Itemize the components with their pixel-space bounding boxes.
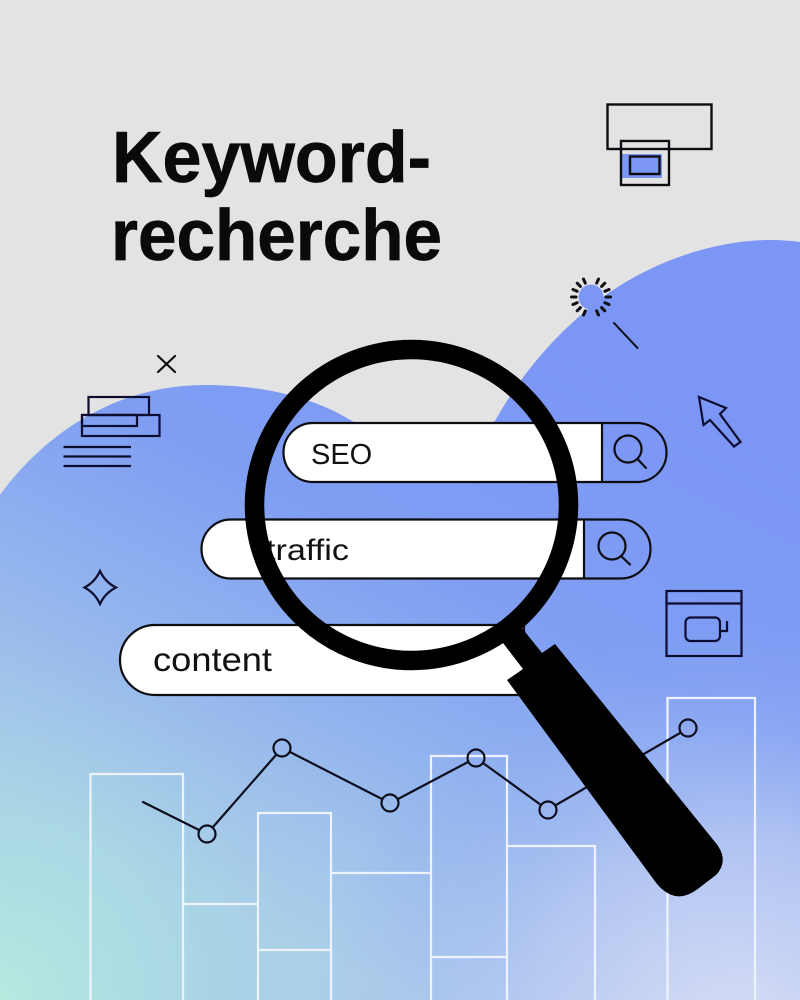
search bar: traffic: traffic [266,534,349,567]
magnifying glass [254,350,723,896]
search bar: SEO [284,423,666,482]
search bar: content: content [153,641,272,678]
bar chart [90,698,755,1000]
search bar: SEO: SEO [311,439,372,471]
handle [503,628,723,896]
title: recherche [111,196,442,276]
icon: sun burst [572,279,610,315]
lens ring [254,350,568,660]
icon: four point star [84,571,116,604]
line chart [143,720,696,842]
search bar: traffic [202,520,650,578]
title: Keyword- [112,118,431,198]
search bar: content [120,625,524,695]
icon: browser window with camera [666,591,742,656]
icon: diagonal stroke [614,323,638,348]
icon: cursor arrow [699,397,740,446]
icon: overlapping windows top right [608,104,712,185]
icon: stacked layers with text lines [64,397,160,466]
title [111,118,442,276]
icon: close cross [158,356,175,372]
blue gradient blob [0,240,800,1000]
